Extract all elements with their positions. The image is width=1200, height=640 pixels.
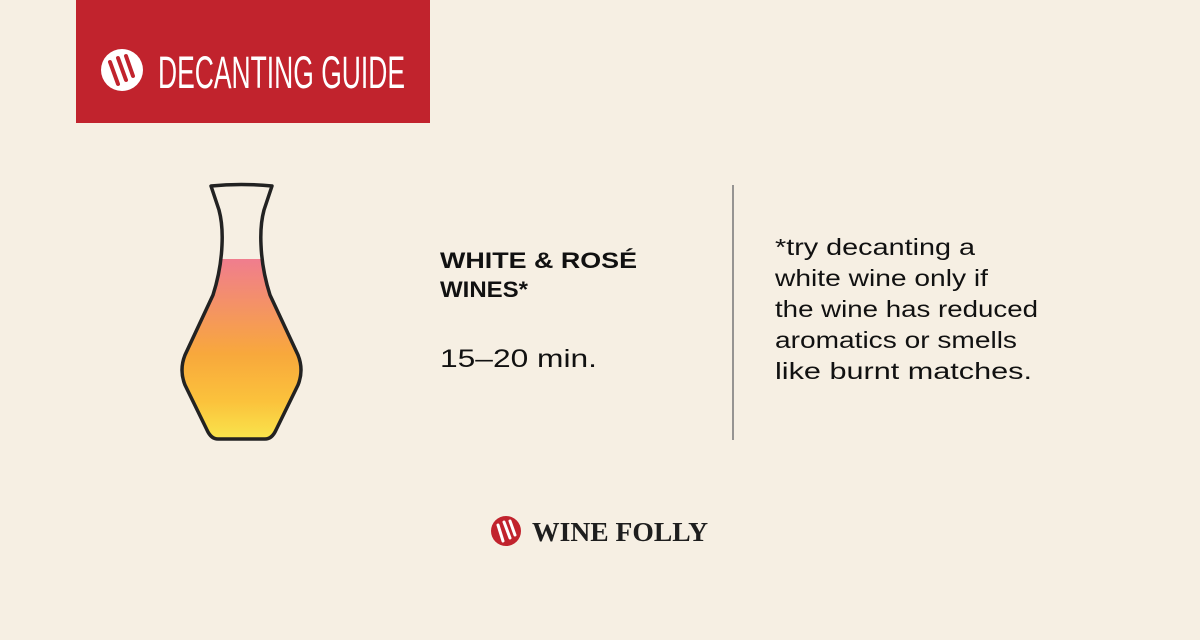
icon: header logo <box>101 49 143 91</box>
header banner <box>76 0 430 123</box>
text: footnote: white wine only if <box>774 265 989 291</box>
heading: wine type: WHITE & ROSÉ <box>440 248 637 273</box>
text: footnote: aromatics or smells <box>775 327 1017 353</box>
heading: wine type: WINES* <box>440 277 528 302</box>
heading: wine type <box>440 248 637 302</box>
text: footnote <box>774 234 1038 384</box>
text: footnote: like burnt matches. <box>775 358 1032 384</box>
text: decant time: 15–20 min. <box>440 345 597 373</box>
text: footnote: the wine has reduced <box>775 296 1038 322</box>
text: footnote: *try decanting a <box>775 234 975 260</box>
footer logo: WINE FOLLY <box>532 517 708 547</box>
icon: decanter <box>180 182 303 441</box>
title: DECANTING GUIDE <box>158 47 405 98</box>
